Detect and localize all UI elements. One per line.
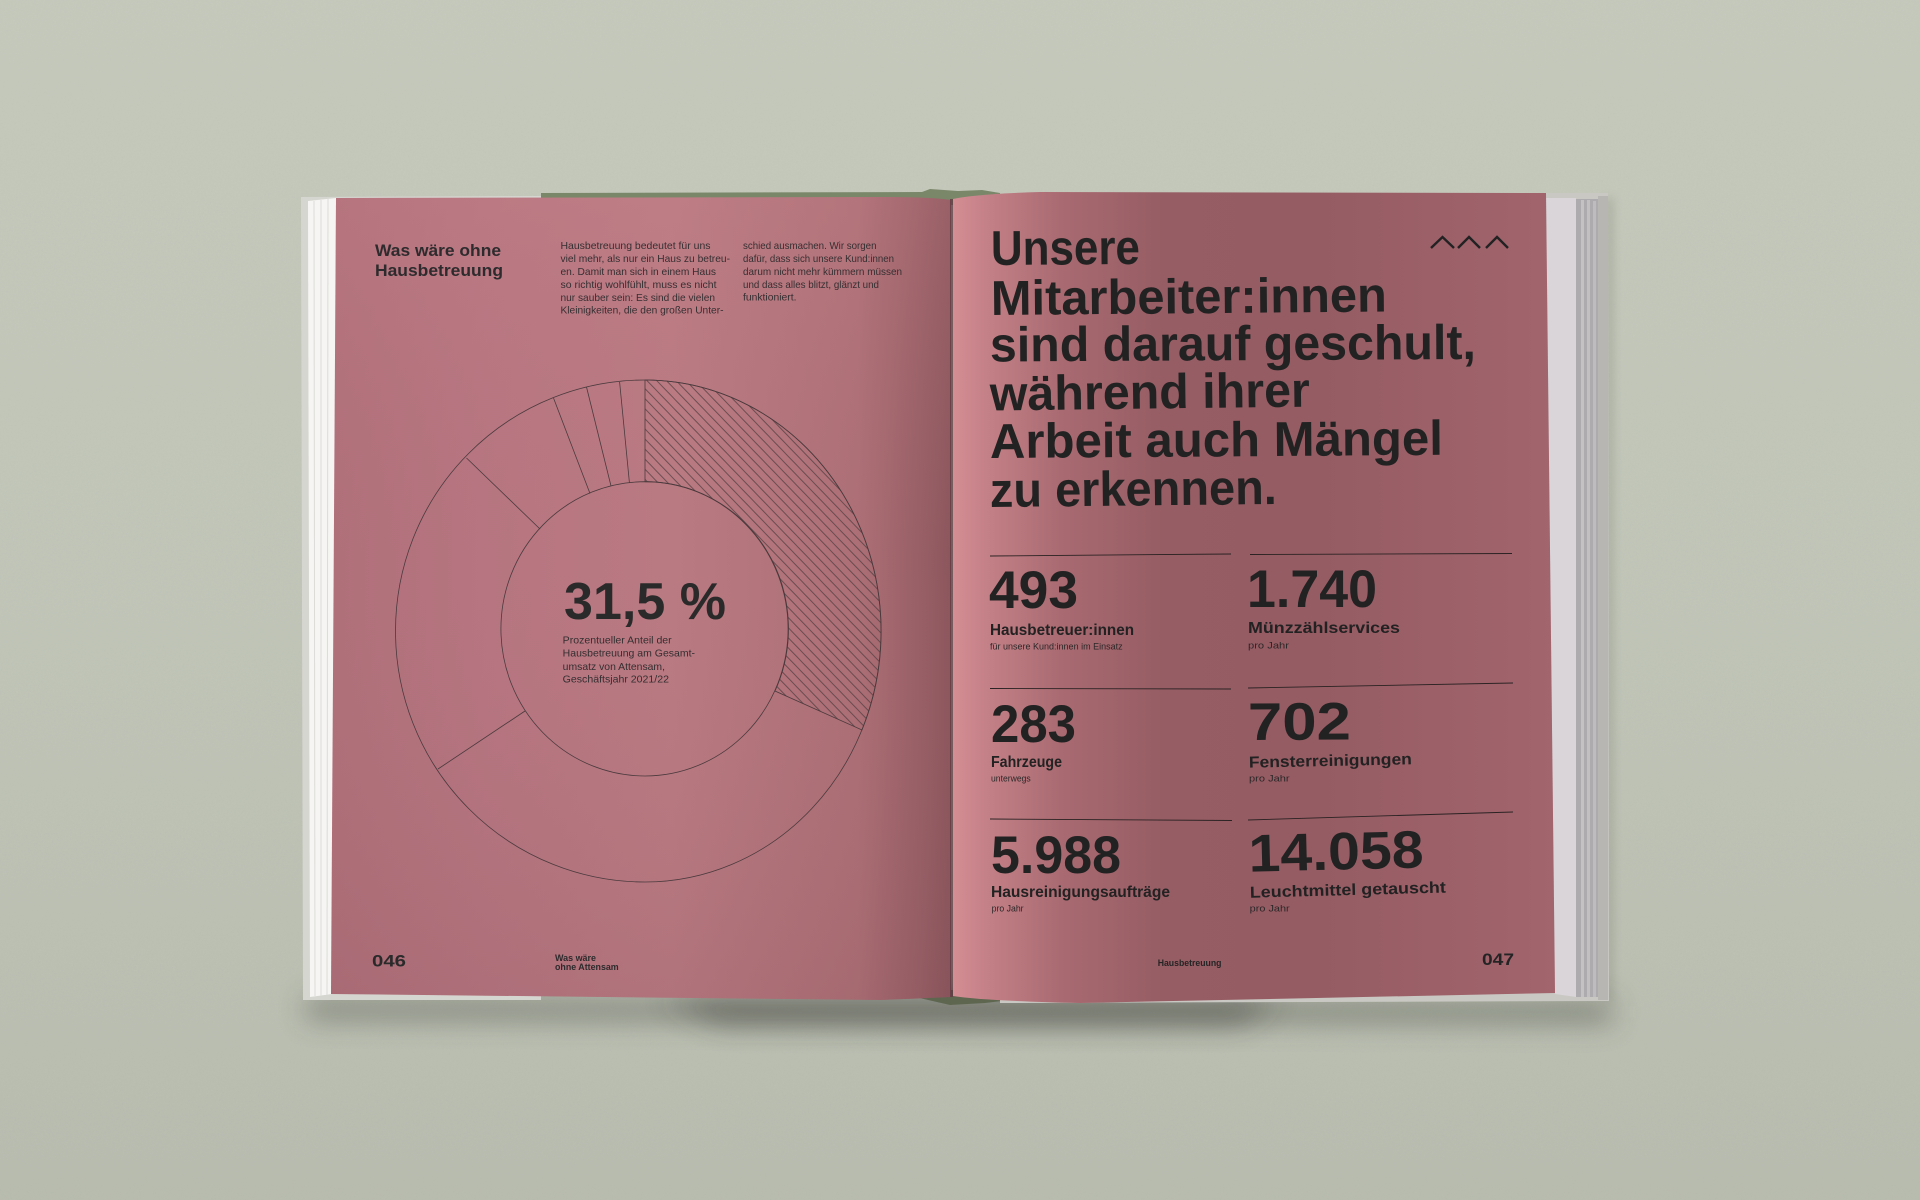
text block: intro column two: und dass alles blitzt, glänzt und [743, 279, 879, 291]
headline: Mitarbeiter:innen [991, 269, 1387, 326]
footer section label: Was wäre [555, 953, 596, 964]
stat: 5.988 Hausreinigungsaufträge: pro Jahr [992, 904, 1024, 915]
text block: intro column two [743, 240, 902, 304]
stat: 5.988 Hausreinigungsaufträge: 5.988 [991, 826, 1121, 885]
left page block [308, 198, 336, 997]
text block: intro column one: en. Damit man sich in einem Haus [560, 266, 716, 278]
cloth spine top [541, 189, 1000, 205]
donut chart [395, 380, 881, 882]
stat: 283 Fahrzeuge: unterwegs [991, 774, 1031, 785]
headline: während ihrer [988, 364, 1310, 422]
stat: 1.740 Münzzählservices: 1.740 [1247, 560, 1377, 619]
stat: 702 Fensterreinigungen [1248, 683, 1513, 785]
donut caption: Hausbetreuung am Gesamt- [563, 649, 695, 660]
panel: left page [331, 197, 951, 1000]
text block: intro column two: schied ausmachen. Wir sorgen [743, 240, 877, 252]
text block: intro column one: Hausbetreuung bedeutet für uns [560, 240, 710, 252]
headline: Unsere [991, 221, 1140, 276]
stat: 283 Fahrzeuge: 283 [991, 695, 1076, 754]
page lighting [331, 197, 951, 1000]
inner ring [501, 482, 788, 776]
stat: 1.740 Münzzählservices: pro Jahr [1248, 640, 1289, 651]
donut caption: Geschäftsjahr 2021/22 [563, 675, 669, 686]
page sheet [331, 197, 951, 1000]
page sheet [953, 192, 1555, 1003]
heading: Was wäre ohne Hausbetreuung [375, 242, 503, 280]
page number 046: 046 [372, 952, 406, 971]
stat: 14.058 Leuchtmittel getauscht: 14.058 [1248, 820, 1424, 884]
footer section label: Hausbetreuung [1158, 958, 1222, 969]
stat: 14.058 Leuchtmittel getauscht [1248, 812, 1513, 914]
donut caption: umsatz von Attensam, [563, 662, 665, 673]
right page block [1546, 198, 1576, 997]
stat: 14.058 Leuchtmittel getauscht: pro Jahr [1250, 903, 1290, 914]
stat: 702 Fensterreinigungen: Fensterreinigungen [1249, 751, 1412, 772]
right page stripes [1576, 199, 1598, 997]
cover board right [1000, 193, 1609, 1003]
outer ring [395, 380, 881, 882]
text block: intro column one: so richtig wohlfühlt, muss es nicht [560, 279, 717, 291]
book: cover, spine and page blocks [301, 189, 1609, 1005]
stat: 493 Hausbetreuer:innen: 493 [989, 561, 1078, 620]
stat: 5.988 Hausreinigungsaufträge [990, 819, 1232, 915]
cover board left [301, 196, 541, 1000]
hatched segment 31,5 % [645, 380, 881, 730]
footer section label [555, 953, 619, 973]
text block: intro column one: nur sauber sein: Es sind die vielen [560, 292, 715, 304]
stat: 283 Fahrzeuge: Fahrzeuge [991, 754, 1062, 771]
stat: 1.740 Münzzählservices [1247, 554, 1512, 651]
headline: sind darauf geschult, [990, 316, 1476, 372]
text block: intro column two: darum nicht mehr kümmern müssen [743, 266, 902, 278]
stat: 14.058 Leuchtmittel getauscht: Leuchtmittel getauscht [1250, 880, 1447, 902]
text block: intro column one: viel mehr, als nur ein Haus zu betreu- [560, 253, 730, 265]
page number 047: 047 [1482, 950, 1514, 969]
book shadow [306, 198, 1612, 1024]
heading: Was wäre ohne Hausbetreuung: Was wäre ohne [375, 242, 501, 260]
text block: intro column two: funktioniert. [743, 292, 796, 304]
gutter [950, 199, 953, 997]
donut caption: Prozentueller Anteil der [563, 636, 672, 646]
icon: three roof carets [1431, 237, 1508, 248]
text block: intro column one [560, 240, 730, 316]
heading: Was wäre ohne Hausbetreuung: Hausbetreuung [375, 262, 503, 280]
stat: 493 Hausbetreuer:innen: Hausbetreuer:innen [990, 622, 1134, 639]
stat: 493 Hausbetreuer:innen: für unsere Kund:innen im Einsatz [990, 641, 1123, 652]
cover edge right [1598, 196, 1608, 1000]
stat: 493 Hausbetreuer:innen [989, 554, 1231, 652]
left page stripes [314, 199, 328, 996]
segment dividers [438, 382, 629, 769]
footer section label: ohne Attensam [555, 962, 619, 973]
text block: intro column one: Kleinigkeiten, die den großen Unter- [560, 304, 724, 316]
stat: 1.740 Münzzählservices: Münzzählservices [1248, 620, 1400, 637]
headline: Arbeit auch Mängel [990, 412, 1443, 469]
panel: right page [950, 192, 1555, 1003]
stat: 5.988 Hausreinigungsaufträge: Hausreinigungsaufträge [991, 884, 1170, 901]
headline [988, 221, 1476, 518]
stat: 283 Fahrzeuge [990, 688, 1231, 785]
value: 31,5 %: 31,5 % [564, 573, 726, 631]
stat: 702 Fensterreinigungen: pro Jahr [1249, 774, 1290, 785]
stat: 702 Fensterreinigungen: 702 [1248, 692, 1351, 752]
donut caption [563, 636, 695, 686]
headline: zu erkennen. [990, 461, 1277, 518]
cloth spine bottom [541, 990, 1010, 1005]
text block: intro column two: dafür, dass sich unsere Kund:innen [743, 253, 894, 265]
